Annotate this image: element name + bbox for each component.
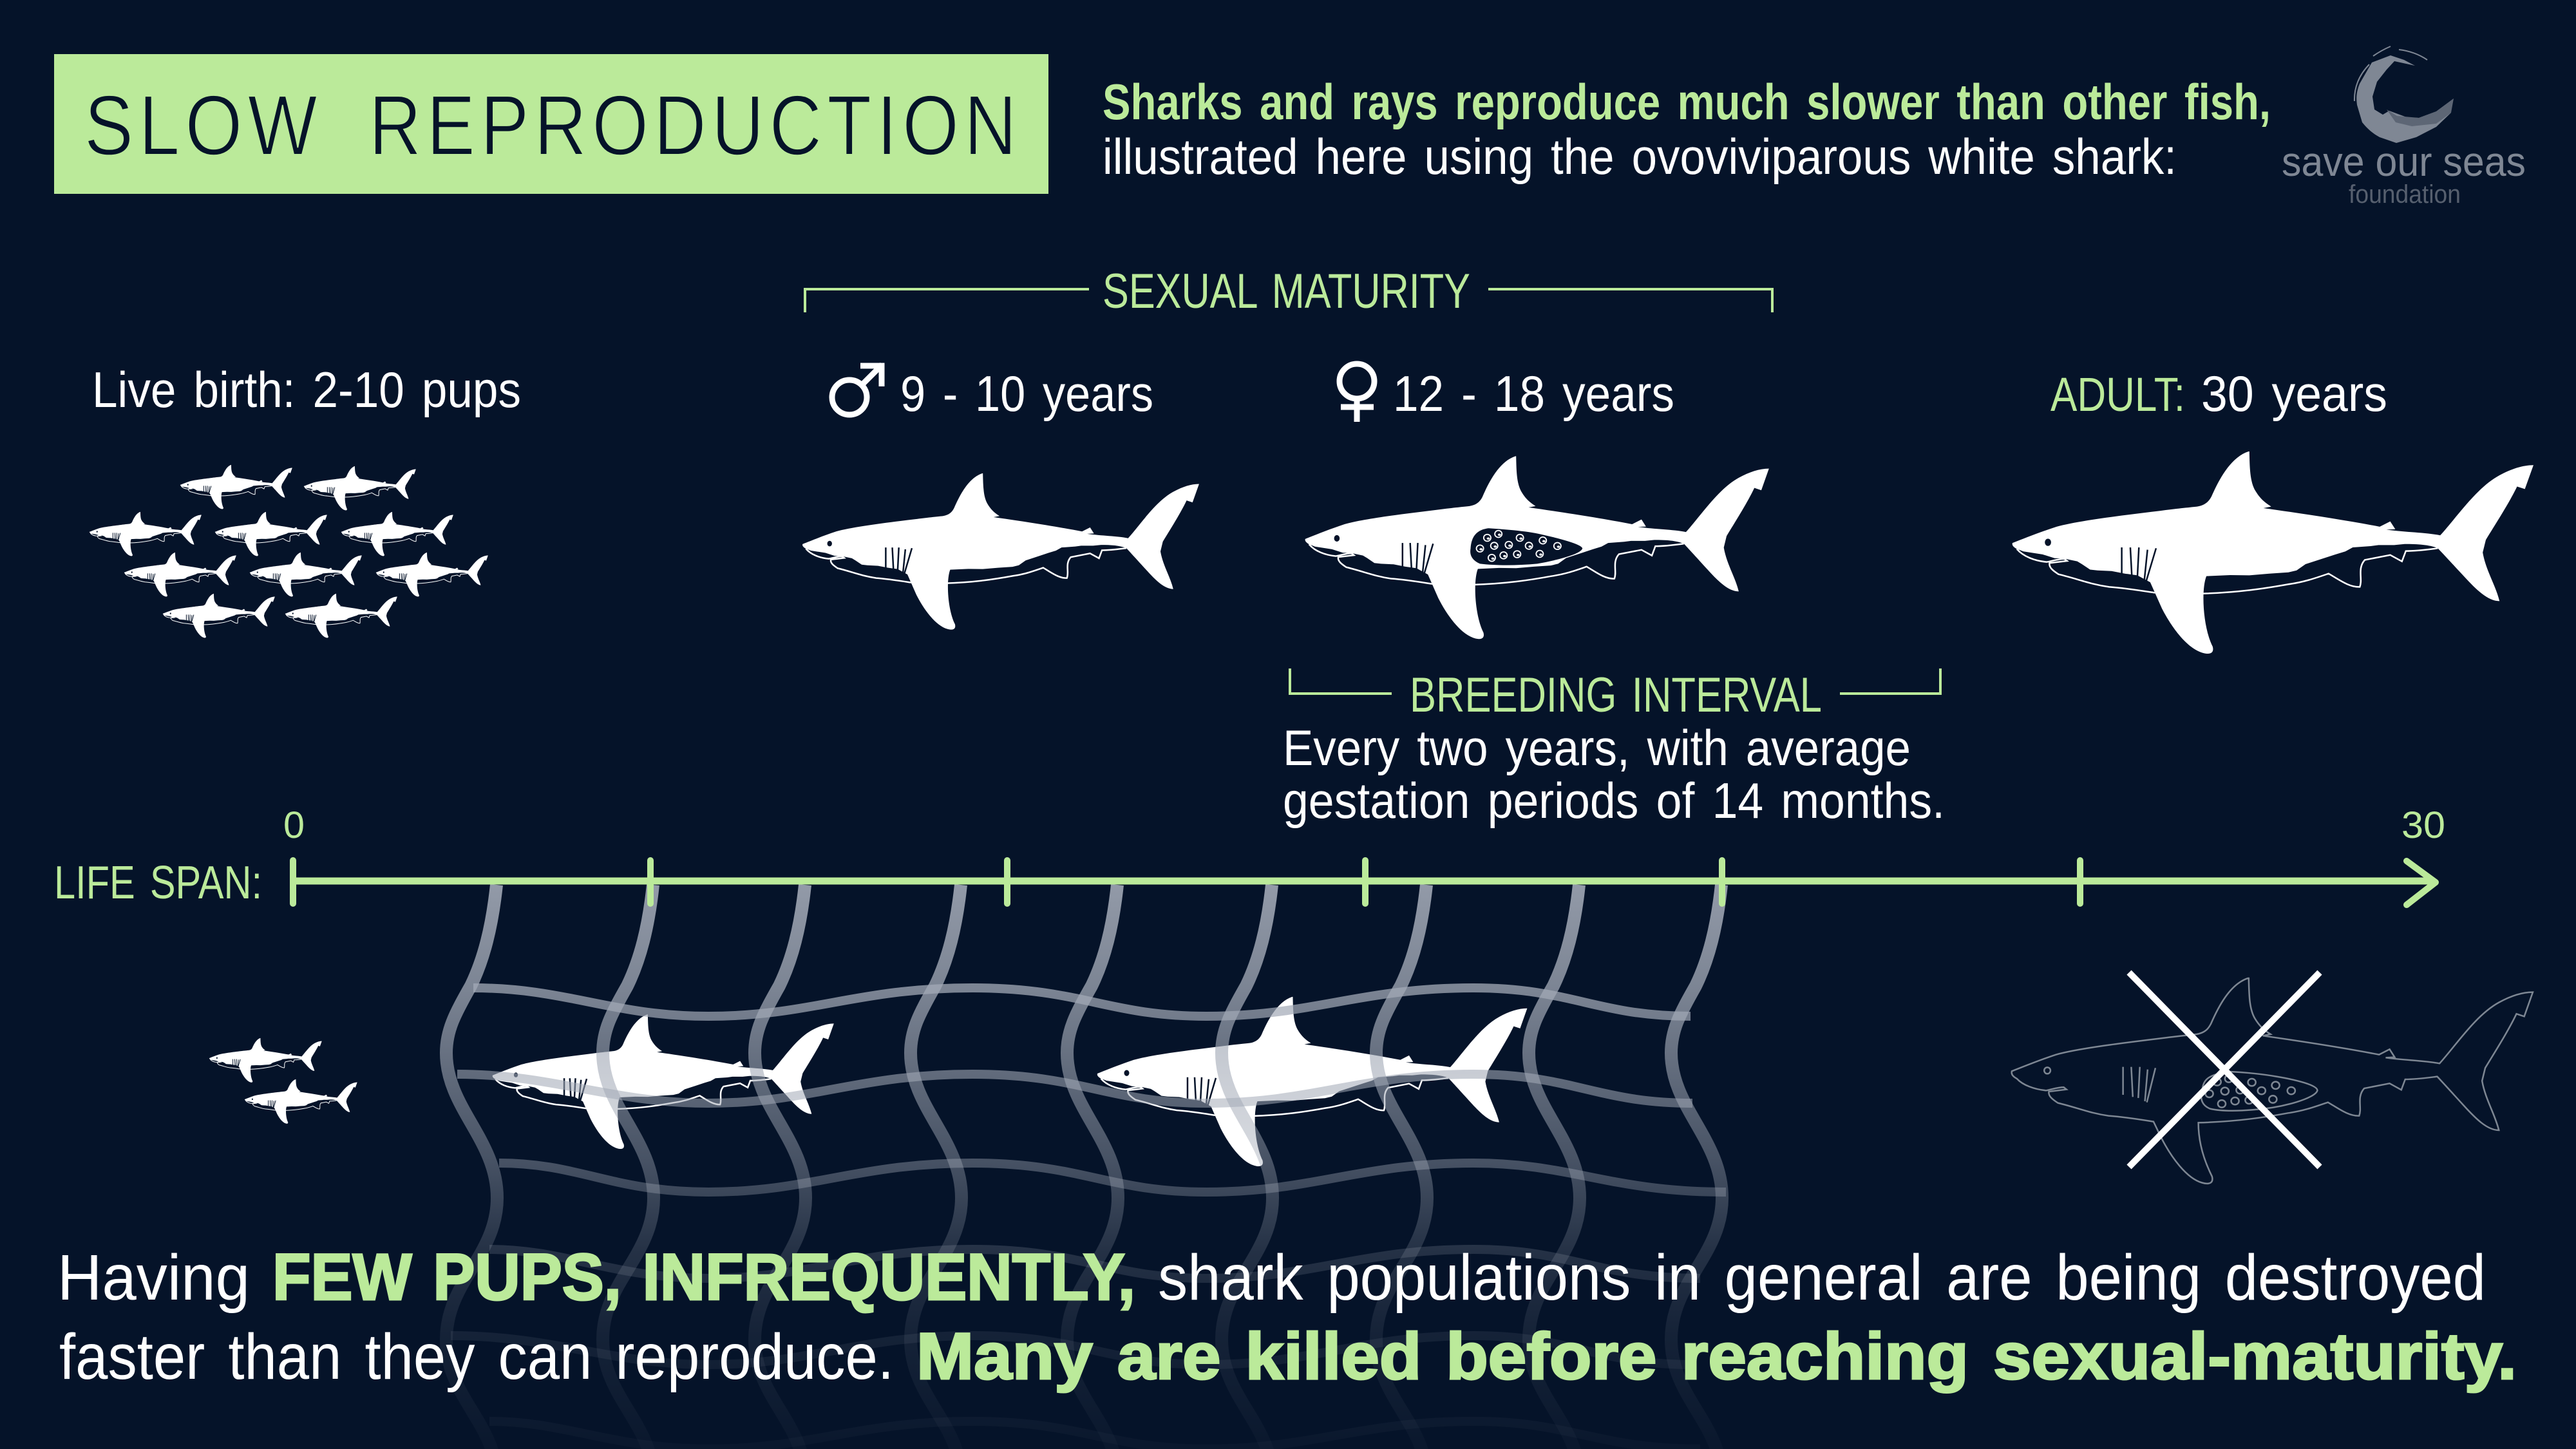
axis scale: 30: 30 [2401,804,2445,846]
conclusion line two: Many are killed before reaching sexual-maturity. [916,1320,2517,1393]
sexual maturity bracket and heading [805,264,1772,319]
adult label: ADULT: [2050,368,2185,421]
adult label [2050,365,2387,422]
title banner: REPRODUCTION [369,78,1022,173]
conclusion line one: Having [57,1242,250,1314]
logo: save our seas foundation: foundation [2349,180,2461,209]
shark school: ten pups [90,465,488,638]
breeding interval description: Every two years, with average [1283,719,1911,776]
life span axis arrow [293,860,2436,905]
outline shark that never was: dead adult [2012,978,2533,1184]
logo: save our seas foundation: save our seas [2282,138,2526,185]
intro text [1103,73,2271,185]
intro text: Sharks and rays reproduce much slower than other fish, [1103,73,2271,130]
breeding interval description: gestation periods of 14 months. [1283,772,1945,829]
shark caught in net, left [493,1014,834,1149]
life span label: LIFE SPAN: [54,857,262,909]
female maturity label: 12 - 18 years [1393,365,1674,422]
conclusion line two [59,1320,2517,1393]
logo: save our seas foundation [2282,46,2526,209]
title banner [54,54,1048,194]
live birth label: Live birth: 2-10 pups [92,361,521,418]
intro text: illustrated here using the ovoviviparous white shark: [1103,128,2177,185]
conclusion line two: faster than they can reproduce. [59,1321,894,1393]
breeding interval bracket and heading: BREEDING INTERVAL [1410,668,1822,723]
sexual maturity bracket and heading: SEXUAL MATURITY [1103,264,1470,319]
conclusion line one: shark populations in general are being destroyed [1158,1242,2486,1314]
adult label: 30 years [2201,365,2387,422]
adult shark [2012,451,2533,654]
shark caught in net, right [1097,997,1527,1166]
conclusion line one: FEW PUPS, INFREQUENTLY, [272,1240,1135,1314]
male maturity label: 9 - 10 years [900,365,1153,422]
fishing net [446,885,1726,1449]
small sharks before the net [209,1038,357,1124]
breeding interval description [1283,719,1945,829]
title banner: SLOW [84,78,323,173]
female shark with pups inside [1305,456,1769,639]
conclusion line one [57,1240,2486,1314]
male shark [802,473,1199,630]
axis scale: 0: 0 [283,804,305,846]
cross over outline shark [2129,972,2320,1167]
